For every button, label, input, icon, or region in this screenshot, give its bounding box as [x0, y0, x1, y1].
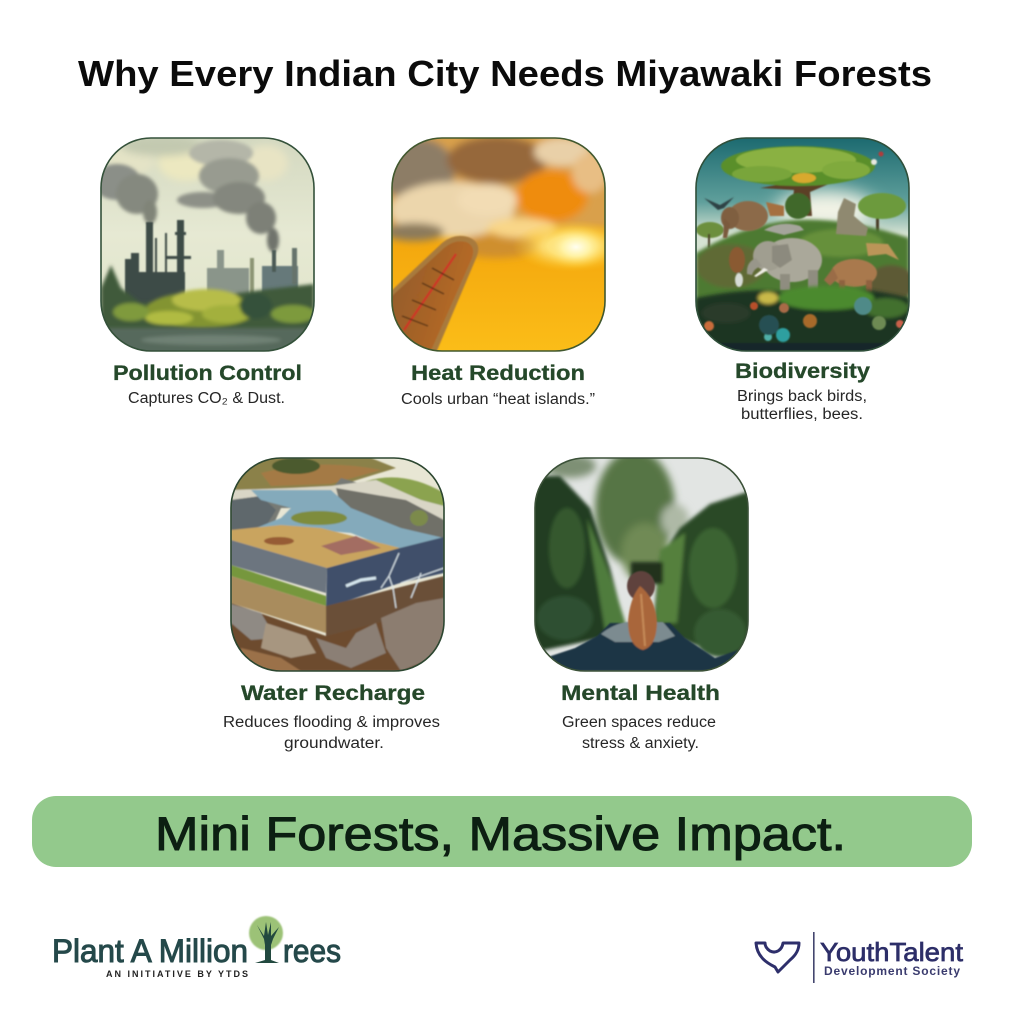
- description: heat reduction: Cools urban “heat islands.”: [401, 391, 595, 408]
- back elephant: [728, 201, 768, 231]
- logo: YouthTalent Development Society: Development Society: [824, 964, 960, 978]
- panel: biodiversity: [696, 138, 915, 423]
- banner: tagline: [32, 796, 972, 867]
- icon: tree with hand trunk: [249, 916, 283, 963]
- heading: pollution control: Pollution Control: [113, 361, 302, 385]
- panel: mental health: [530, 450, 753, 752]
- logo: Plant A Million Trees: rees: [283, 933, 341, 969]
- rhino: [831, 259, 877, 287]
- factory: [125, 220, 191, 314]
- big elephant: [762, 238, 822, 282]
- description line 2: mental health: stress & anxiety.: [582, 735, 699, 752]
- foliage: [101, 265, 315, 333]
- image: animals on a green hill under a tree: [696, 138, 915, 351]
- image: woman between tall green hedges: [530, 450, 753, 671]
- heading: heat reduction: Heat Reduction: [411, 361, 585, 385]
- woman: [545, 571, 747, 671]
- distant industry: [206, 247, 299, 296]
- heading: mental health: Mental Health: [561, 681, 720, 705]
- image: soil cross-section with river: [231, 458, 444, 671]
- right tree: [696, 193, 906, 248]
- description: biodiversity: Brings back birds,: [737, 388, 867, 405]
- thermometer: [390, 236, 478, 353]
- logo: Plant A Million Trees: AN INITIATIVE BY YTDS: [106, 969, 248, 979]
- panel: heat reduction: [391, 137, 606, 404]
- description: mental health: Green spaces reduce: [562, 714, 716, 731]
- logo: Plant A Million Trees: Plant A Million: [52, 933, 248, 969]
- panel: water recharge: [223, 458, 444, 752]
- description line 2: water recharge: groundwater.: [284, 735, 384, 752]
- water: [110, 326, 306, 350]
- icon: Y heart chevron: [756, 943, 799, 972]
- heading: water recharge: Water Recharge: [241, 681, 425, 705]
- ground with flowers: [696, 286, 909, 351]
- banner: tagline: Mini Forests, Massive Impact.: [155, 807, 846, 860]
- image: thermometer against a hot sky: [391, 137, 606, 352]
- logo: YouthTalent Development Society: [756, 932, 964, 983]
- animals: [704, 152, 899, 294]
- logo: Plant A Million Trees: [52, 916, 341, 979]
- hill: [696, 216, 908, 314]
- description: pollution control: Captures CO₂ & Dust.: [128, 390, 285, 407]
- tree: [721, 146, 875, 219]
- smoke plumes: [93, 140, 279, 252]
- image: factory smoke behind greenery: [93, 136, 319, 358]
- logo: YouthTalent Development Society: YouthTalent: [820, 937, 964, 967]
- panel: pollution control: [93, 136, 319, 407]
- description line 2: biodiversity: butterflies, bees.: [741, 406, 863, 423]
- description: water recharge: Reduces flooding & improves: [223, 714, 440, 731]
- heading: biodiversity: Biodiversity: [735, 359, 870, 383]
- title: Why Every Indian City Needs Miyawaki Forests: [78, 53, 932, 94]
